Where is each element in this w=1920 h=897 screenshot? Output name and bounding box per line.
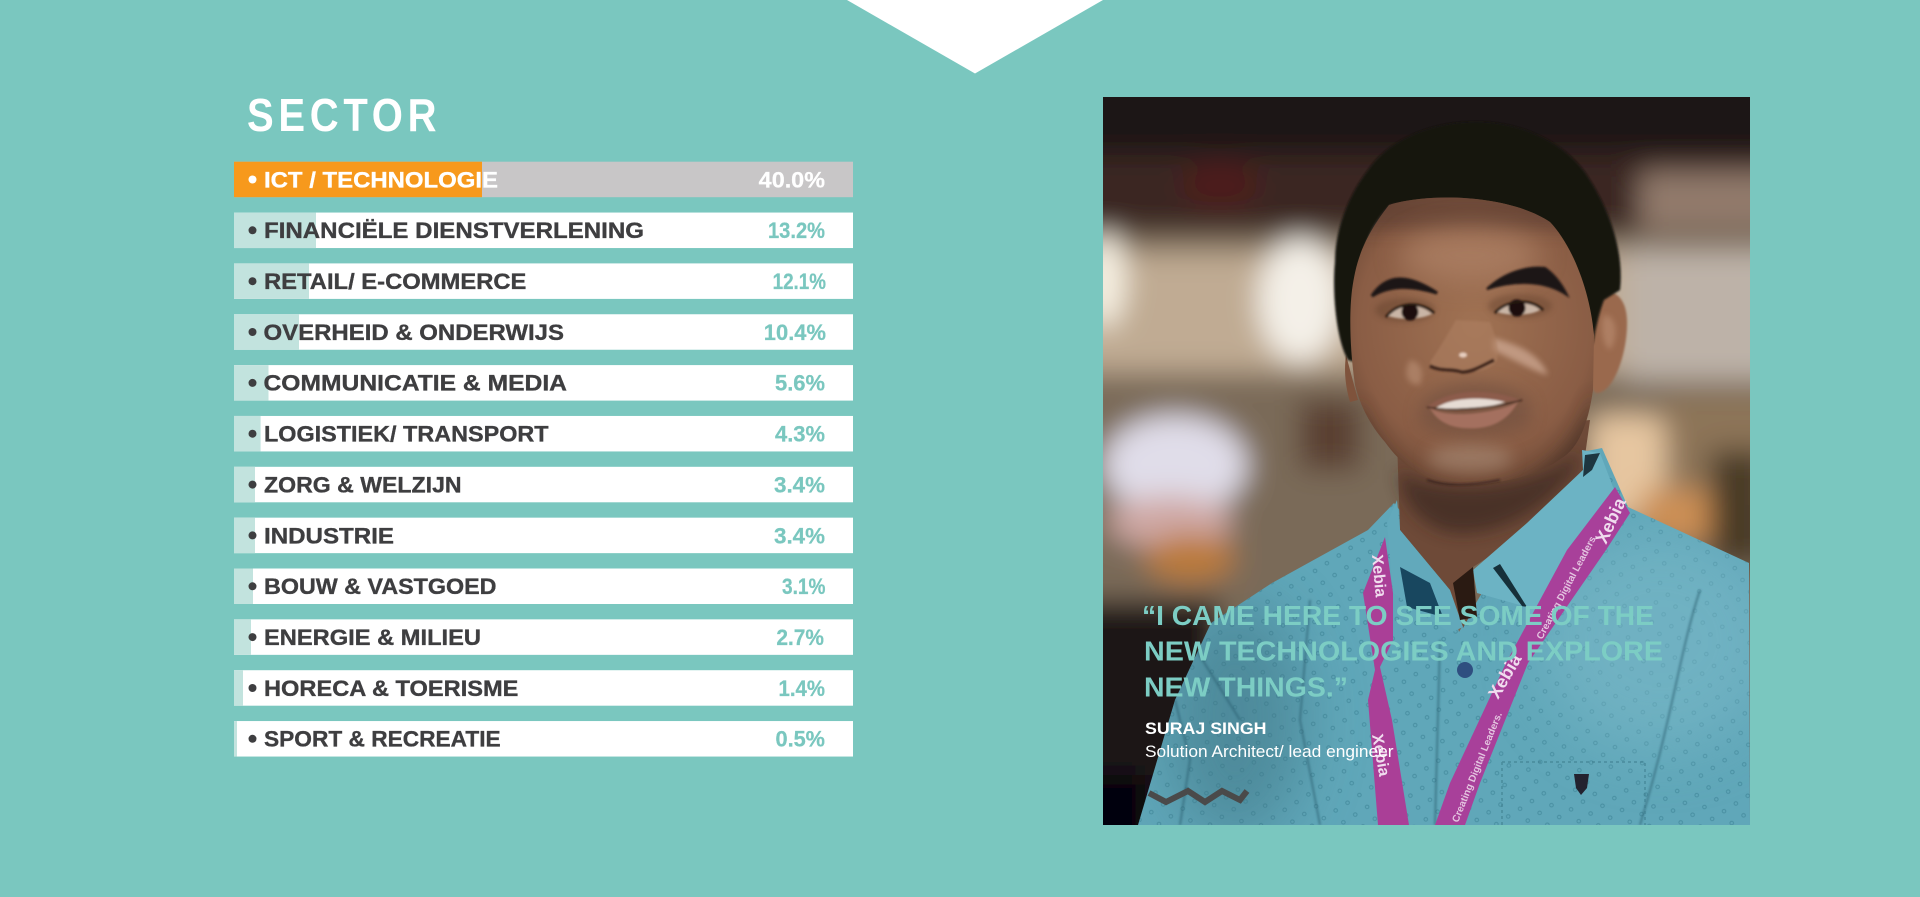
lanyard: Creating Digital Leaders. bbox=[1535, 532, 1600, 641]
row: Sport & recreatie: SPORT & RECREATIE bbox=[264, 727, 501, 752]
attribution: Solution Architect/ lead engineer bbox=[1145, 742, 1394, 761]
row: Industrie: INDUSTRIE bbox=[264, 523, 394, 548]
row: Retail / e-commerce: RETAIL/ E-COMMERCE bbox=[264, 269, 526, 294]
row: Financiële dienstverlening: FINANCIËLE DIENSTVERLENING bbox=[264, 218, 644, 243]
row: Overheid & onderwijs: OVERHEID & ONDERWIJS bbox=[264, 320, 564, 345]
collar left bbox=[1387, 500, 1463, 633]
row: Industrie: 3.4% bbox=[774, 523, 825, 548]
shirt bbox=[1138, 448, 1750, 825]
row: Overheid & onderwijs bbox=[234, 314, 853, 350]
zigzag accent bbox=[1149, 791, 1247, 802]
ear bbox=[1589, 292, 1627, 393]
row: Zorg & welzijn bbox=[234, 467, 853, 502]
heading: sector: SECTOR bbox=[247, 90, 441, 142]
button bbox=[1457, 662, 1473, 678]
row: Overheid & onderwijs: 10.4% bbox=[764, 320, 826, 345]
row: ICT / Technologie: ICT / TECHNOLOGIE bbox=[264, 167, 498, 192]
row: Communicatie & media: 5.6% bbox=[775, 371, 825, 396]
row: Sport & recreatie bbox=[234, 721, 853, 757]
collar right bbox=[1473, 450, 1614, 614]
eyebrows bbox=[1372, 279, 1437, 296]
panel: portrait photo with quote bbox=[1103, 97, 1750, 825]
neck bbox=[1397, 420, 1590, 628]
row: Zorg & welzijn: 3.4% bbox=[774, 472, 825, 497]
row: Sport & recreatie: 0.5% bbox=[776, 727, 825, 752]
blurred backdrop bbox=[1103, 97, 1750, 825]
lanyard: Xebia bbox=[1368, 733, 1392, 778]
row: Communicatie & media bbox=[234, 365, 853, 401]
left ear bbox=[1345, 355, 1358, 402]
facial features bbox=[1372, 268, 1567, 484]
row: Horeca & toerisme bbox=[234, 670, 853, 706]
row: ICT / Technologie: 40.0% bbox=[759, 167, 825, 192]
quote: NEW TECHNOLOGIES AND EXPLORE bbox=[1144, 636, 1663, 667]
row: Communicatie & media: COMMUNICATIE & MEDIA bbox=[264, 371, 567, 396]
bar chart: sectors bbox=[234, 162, 853, 757]
row: Energie & milieu: 2.7% bbox=[776, 625, 824, 650]
row: Bouw & vastgoed: 3.1% bbox=[782, 574, 826, 599]
lanyard: Creating Digital Leaders. bbox=[1451, 711, 1505, 824]
row: Energie & milieu: ENERGIE & MILIEU bbox=[264, 625, 481, 650]
mouth bbox=[1427, 392, 1520, 407]
lanyard: Xebia bbox=[1484, 650, 1526, 702]
row: Bouw & vastgoed: BOUW & VASTGOED bbox=[264, 574, 496, 599]
row: Logistiek / transport bbox=[234, 416, 853, 451]
row: Horeca & toerisme: 1.4% bbox=[778, 676, 825, 701]
row: Retail / e-commerce: 12.1% bbox=[773, 269, 826, 294]
lanyard bbox=[1363, 487, 1630, 825]
lanyard: Xebia bbox=[1591, 494, 1630, 547]
attribution: SURAJ SINGH bbox=[1145, 719, 1266, 738]
quote bbox=[1142, 600, 1663, 703]
pocket logo bbox=[1574, 774, 1589, 795]
row: Retail / e-commerce bbox=[234, 263, 853, 299]
chin line bbox=[1427, 480, 1500, 484]
lanyard: Xebia bbox=[1368, 554, 1389, 598]
row: Horeca & toerisme: HORECA & TOERISME bbox=[264, 676, 518, 701]
photo: portrait illustration bbox=[1103, 97, 1750, 825]
row: Industrie bbox=[234, 518, 853, 553]
row: Bouw & vastgoed bbox=[234, 568, 853, 604]
row: Zorg & welzijn: ZORG & WELZIJN bbox=[264, 472, 462, 497]
quote: “I CAME HERE TO SEE SOME OF THE bbox=[1142, 600, 1654, 631]
row: Logistiek / transport: 4.3% bbox=[775, 422, 825, 447]
row: Logistiek / transport: LOGISTIEK/ TRANSPORT bbox=[264, 422, 549, 447]
face bbox=[1350, 198, 1594, 484]
row: Financiële dienstverlening: 13.2% bbox=[768, 218, 825, 243]
top white notch bbox=[847, 0, 1103, 74]
eyes bbox=[1388, 306, 1432, 319]
hair bbox=[1334, 122, 1621, 362]
attribution bbox=[1145, 719, 1394, 761]
row: ICT / Technologie bbox=[234, 162, 853, 197]
quote: NEW THINGS.” bbox=[1144, 672, 1348, 703]
row: Energie & milieu bbox=[234, 619, 853, 655]
row: Financiële dienstverlening bbox=[234, 213, 853, 248]
nose bbox=[1430, 320, 1498, 372]
